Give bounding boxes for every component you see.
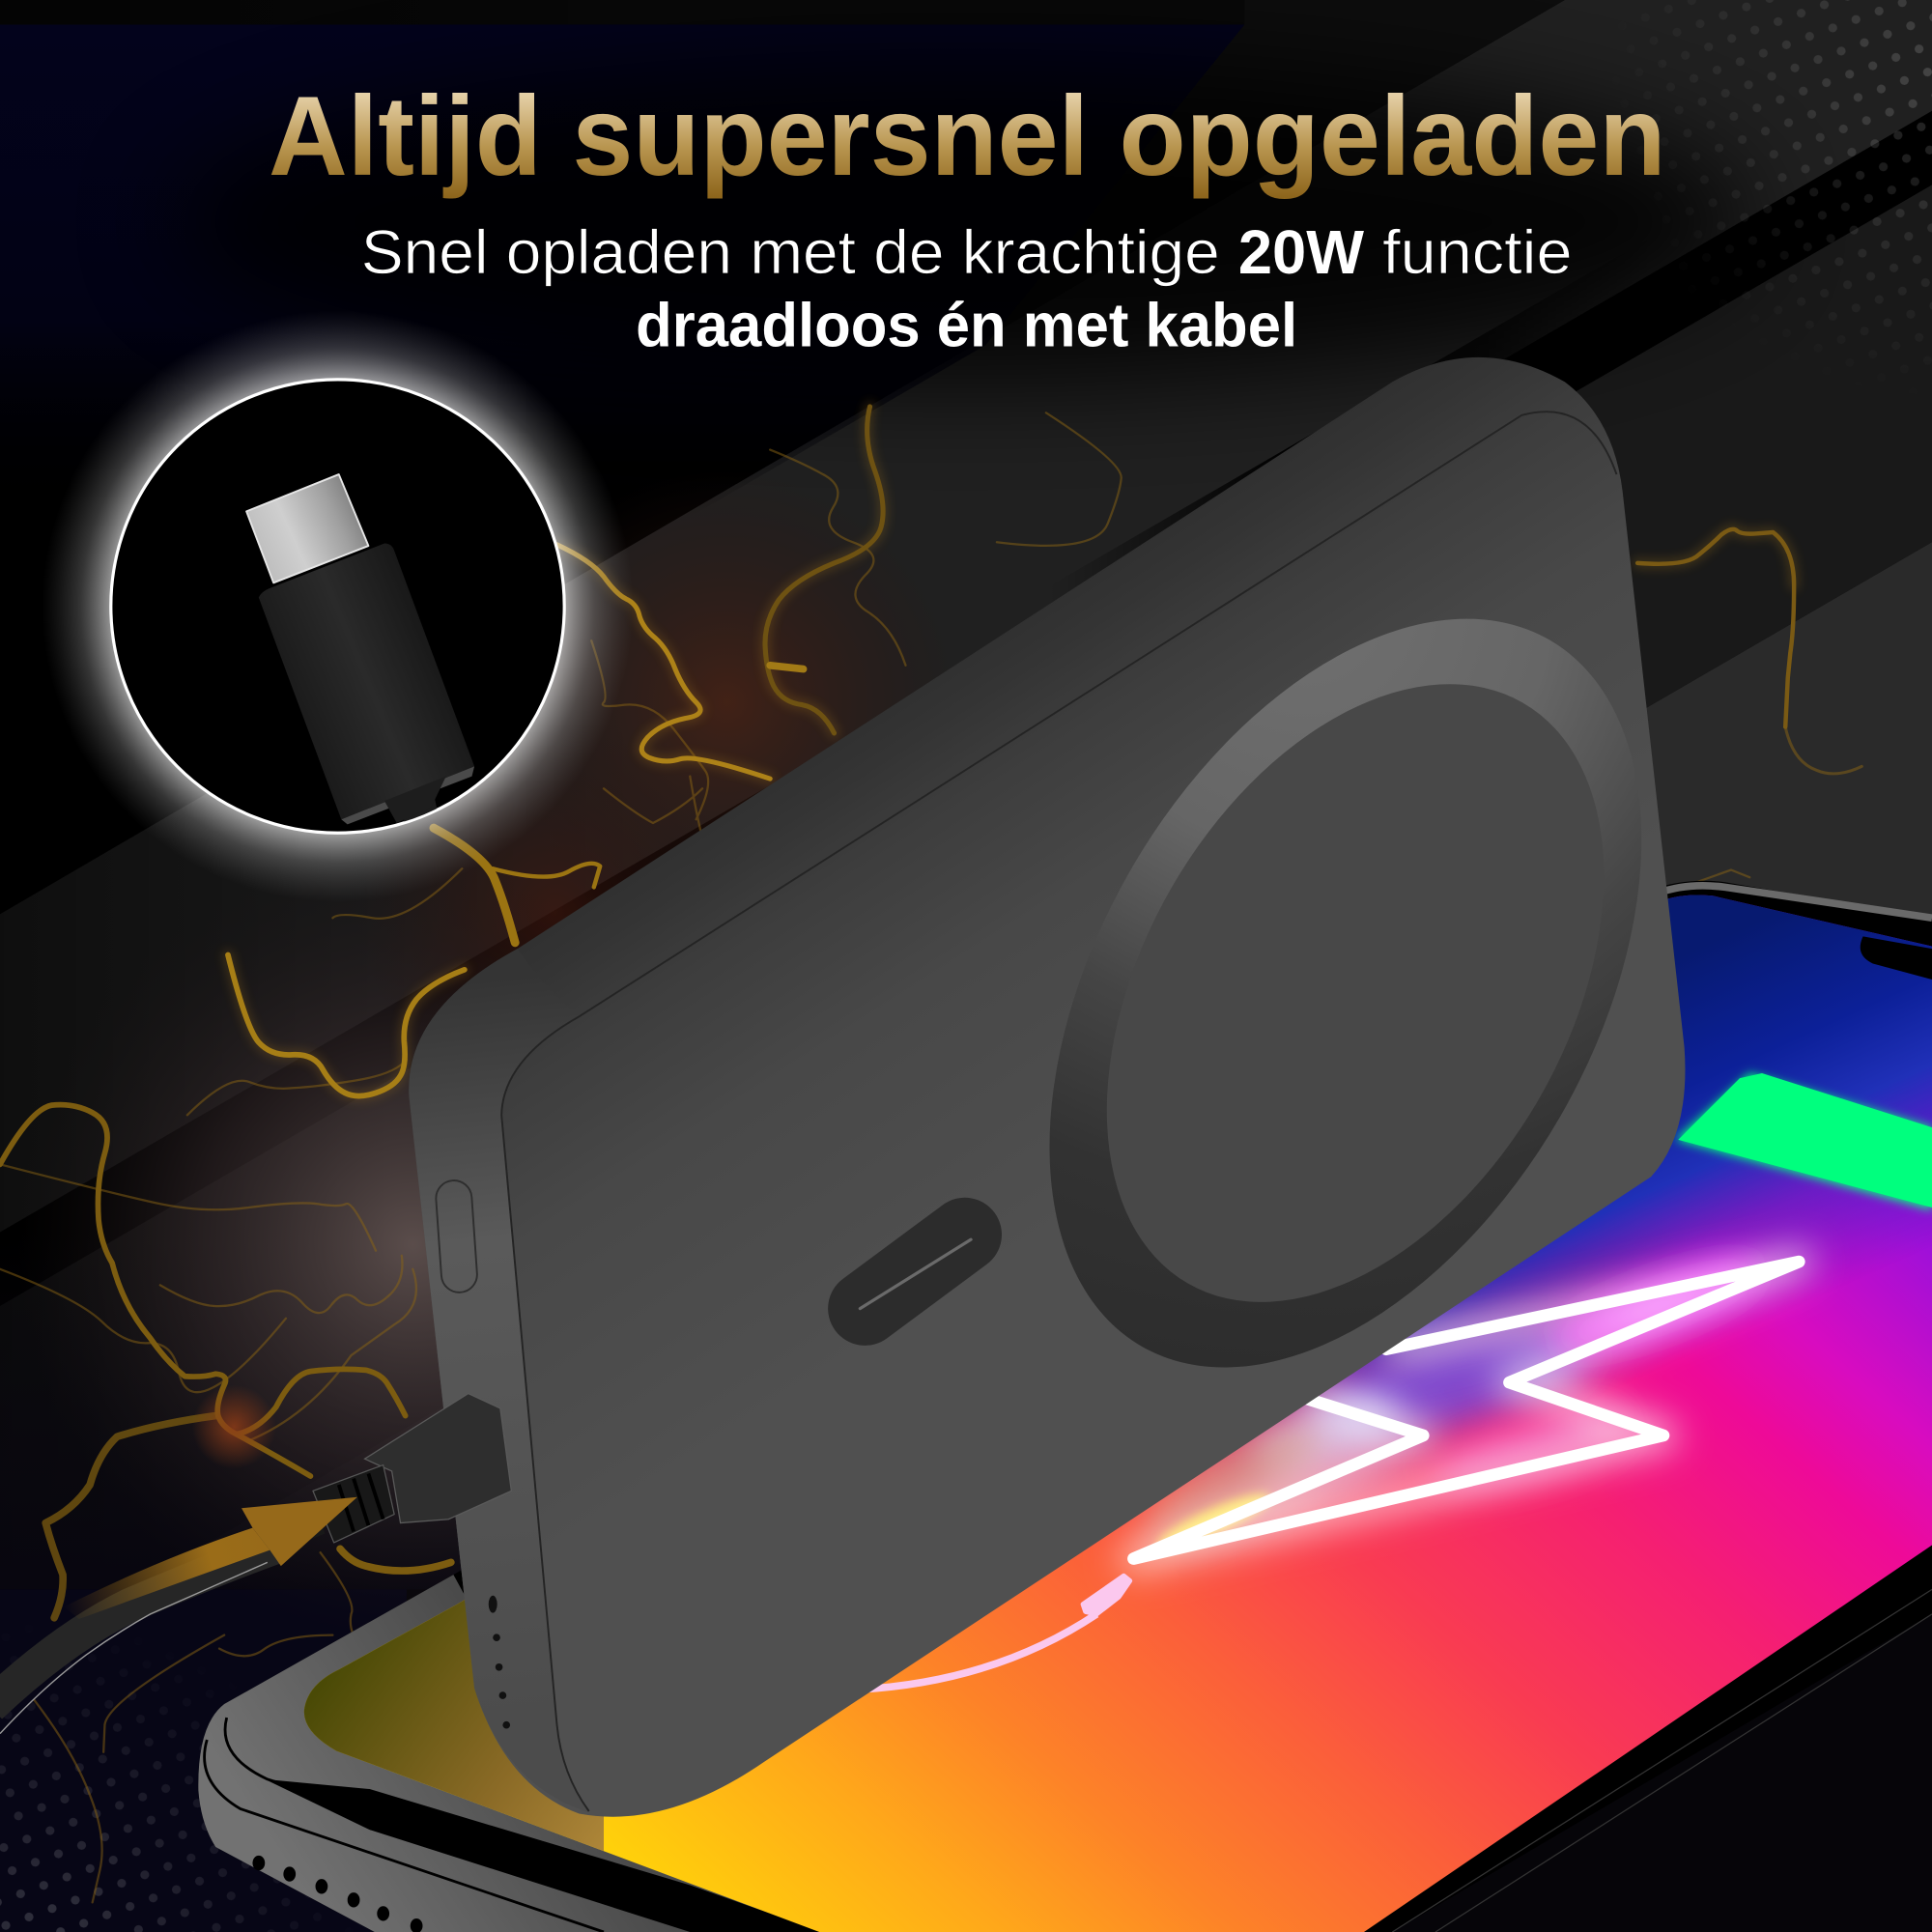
crack: upper right of circle bbox=[765, 407, 883, 733]
cable bbox=[0, 1528, 323, 1734]
subtitle: draadloos én met kabel bbox=[636, 290, 1297, 359]
crack: under circle bbox=[434, 828, 600, 943]
subtitle: 20W bbox=[1238, 217, 1365, 287]
callout circle bbox=[42, 310, 634, 902]
title: Altijd supersnel opgeladen bbox=[269, 72, 1665, 199]
blue top of screen bbox=[1204, 895, 1932, 1501]
lightning cracks bbox=[0, 407, 1861, 1902]
phone notch bbox=[1861, 936, 1932, 980]
subtitle: functie bbox=[1382, 217, 1573, 287]
USB-C connector bbox=[246, 474, 474, 850]
USB-C port pill bbox=[865, 1235, 965, 1309]
wireless ring bbox=[927, 516, 1764, 1470]
bank shell bbox=[409, 357, 1685, 1817]
subtitle: Snel opladen met de krachtige bbox=[361, 217, 1220, 287]
speaker dots bbox=[489, 1596, 510, 1729]
neon bolt glow bbox=[1133, 1262, 1799, 1559]
bank seam lines bbox=[501, 412, 1616, 1811]
thin cracks bbox=[0, 412, 1861, 1902]
phone screen bbox=[296, 863, 1932, 1932]
plug bbox=[313, 1394, 511, 1543]
screen shadow area bbox=[303, 1600, 604, 1851]
subtitle bbox=[361, 217, 1573, 359]
crack: right of bank bbox=[1637, 529, 1794, 727]
phone body bbox=[198, 881, 1932, 1932]
arrow bbox=[64, 1497, 357, 1619]
speaker holes bbox=[252, 1856, 423, 1932]
neon plug bbox=[869, 1615, 1099, 1692]
top bezel rim bbox=[1658, 886, 1932, 918]
crack: left of bank bbox=[228, 955, 465, 1096]
crack: lower left bbox=[0, 1105, 451, 1618]
side button bbox=[435, 1179, 478, 1293]
thick crack glow bbox=[228, 407, 1794, 1096]
neon bolt line bbox=[1133, 1262, 1799, 1559]
phone black bezel lines bbox=[265, 1779, 823, 1932]
bottom right bezel lines bbox=[1392, 1589, 1932, 1932]
bolt interior colours bbox=[1129, 1245, 1770, 1564]
phone bbox=[198, 881, 1932, 1932]
spark glow bbox=[192, 1385, 276, 1468]
crack: upper centre bbox=[557, 545, 770, 779]
phone rim bbox=[198, 1575, 826, 1932]
green bar bbox=[1676, 1073, 1932, 1210]
glow bbox=[42, 310, 634, 902]
bank side strip bbox=[409, 949, 589, 1812]
power bank bbox=[409, 357, 1764, 1817]
